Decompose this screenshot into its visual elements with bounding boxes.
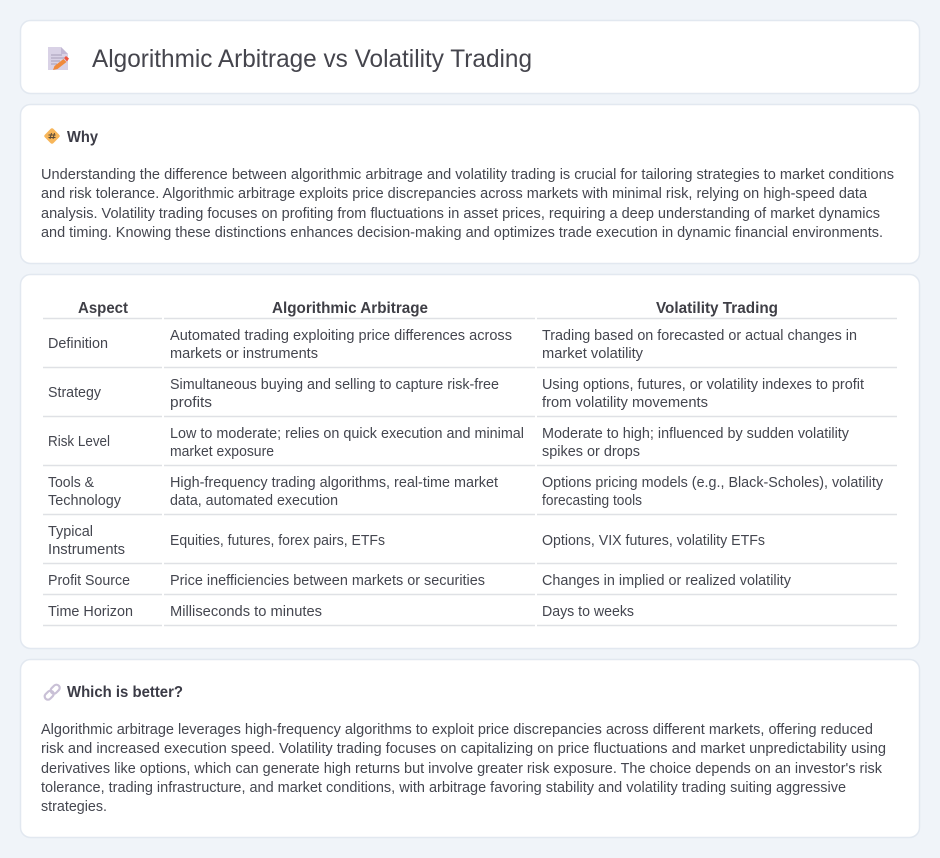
row: typical instruments: Equities, futures, forex pairs, ETFs [170, 533, 385, 549]
panel: comparison table [20, 274, 920, 648]
row: risk level: spikes or drops [542, 444, 640, 460]
row: definition: markets or instruments [170, 346, 318, 362]
row: time horizon: Days to weeks [542, 604, 634, 620]
row: tools and technology: data, automated execution [170, 493, 338, 509]
row: tools and technology: forecasting tools [542, 493, 642, 509]
panel: why [20, 104, 920, 264]
row: risk level: Risk Level [48, 434, 110, 450]
row: definition: Definition [48, 336, 108, 352]
row: strategy: from volatility movements [542, 395, 708, 411]
row: time horizon [48, 604, 634, 620]
row: typical instruments: Typical [48, 524, 93, 540]
row: tools and technology: High-frequency trading algorithms, real-time market [170, 475, 498, 491]
row: profit source [48, 573, 792, 589]
panel: title header [20, 20, 920, 94]
icon: chain link [43, 683, 61, 701]
icon: warning diamond [44, 128, 60, 144]
title: Algorithmic Arbitrage vs Volatility Trading [92, 45, 532, 73]
why paragraph: and risk tolerance. Algorithmic arbitrage exploits price discrepancies across markets with minimal risk, relying on high-speed data [41, 186, 868, 202]
which is better paragraph: strategies. [41, 799, 107, 815]
which is better paragraph: tolerance, trading infrastructure, and market conditions, with arbitrage favoring stability and volatility trading suiting aggressive [41, 780, 846, 796]
row: strategy: Strategy [48, 385, 102, 401]
row: profit source: Price inefficiencies between markets or securities [170, 573, 485, 589]
row: tools and technology: Technology [48, 493, 122, 509]
row: strategy: Using options, futures, or volatility indexes to profit [542, 377, 864, 393]
row: strategy: profits [170, 395, 212, 411]
row: profit source: Profit Source [48, 573, 130, 589]
row: tools and technology [48, 475, 884, 509]
row: strategy [48, 377, 864, 411]
heading: why: Why [67, 129, 98, 146]
row: definition: Trading based on forecasted or actual changes in [542, 328, 857, 344]
row: definition: Automated trading exploiting price differences across [170, 328, 512, 344]
which is better paragraph: risk and increased execution speed. Volatility trading focuses on capitalizing on price fluctuations and market unpredictability using [41, 741, 886, 757]
row: risk level: Moderate to high; influenced by sudden volatility [542, 426, 850, 442]
row: strategy: Simultaneous buying and selling to capture risk-free [170, 377, 499, 393]
row: typical instruments: Options, VIX futures, volatility ETFs [542, 533, 765, 549]
why paragraph: Understanding the difference between algorithmic arbitrage and volatility trading is crucial for tailoring strategies to market conditions [41, 167, 894, 183]
why paragraph: analysis. Volatility trading focuses on profiting from fluctuations in asset prices, requiring a deep understanding of market dynamics [41, 206, 880, 222]
row: risk level [48, 426, 850, 460]
why paragraph: and timing. Knowing these distinctions enhances decision-making and optimizes trade execution in dynamic financial environments. [41, 225, 883, 241]
panel: which is better [20, 660, 920, 838]
heading: which is better: Which is better? [67, 684, 183, 701]
table header: Algorithmic Arbitrage [272, 300, 428, 317]
table header: Aspect [78, 300, 128, 317]
icon: document with pencil [48, 47, 69, 70]
row: profit source: Changes in implied or realized volatility [542, 573, 792, 589]
row: risk level: Low to moderate; relies on quick execution and minimal [170, 426, 524, 442]
row: typical instruments: Instruments [48, 542, 125, 558]
row: risk level: market exposure [170, 444, 274, 460]
row: definition [48, 328, 857, 362]
table header [78, 300, 778, 317]
row: tools and technology: Options pricing models (e.g., Black-Scholes), volatility [542, 475, 884, 491]
row: tools and technology: Tools & [48, 475, 94, 491]
table header: Volatility Trading [656, 300, 778, 317]
row: definition: market volatility [542, 346, 644, 362]
which is better paragraph: Algorithmic arbitrage leverages high-frequency algorithms to exploit price discrepancies across different markets, offering reduced [41, 722, 873, 738]
row: typical instruments [48, 524, 765, 558]
row: time horizon: Time Horizon [48, 604, 133, 620]
row: time horizon: Milliseconds to minutes [170, 604, 322, 620]
why paragraph [41, 167, 894, 241]
which is better paragraph [41, 722, 886, 815]
which is better paragraph: derivatives like options, which can generate high returns but involve greater risk exposure. The choice depends on an investor's risk [41, 761, 883, 777]
